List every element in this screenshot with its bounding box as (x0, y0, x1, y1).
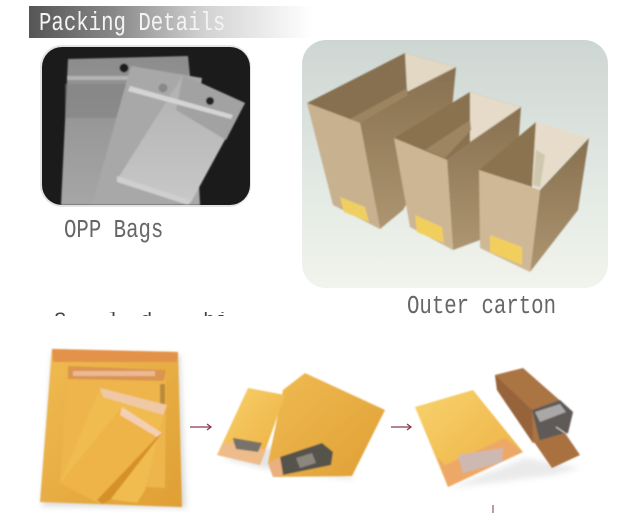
mailer: filled (415, 390, 523, 487)
caption: OPP Bags: OPP Bags (64, 216, 163, 246)
cut-off caption: i (216, 310, 228, 333)
cut-off caption: h (203, 310, 215, 333)
heading band: Packing Details (29, 6, 312, 39)
photo: stack of kraft bubble mailers (40, 349, 186, 508)
cut-off caption: l (107, 310, 119, 333)
heading band: Packing Details: Packing Details (39, 9, 225, 39)
cut-off caption: S (54, 310, 66, 333)
panel: OPP bags photo (40, 45, 251, 207)
photo: mailer and cardboard box (415, 368, 580, 488)
cut-off caption: d (140, 310, 152, 333)
mailer: larger with contents (268, 373, 385, 477)
mailer: smaller with contents (217, 388, 285, 465)
carton: small (479, 122, 589, 272)
panel: outer carton photo (302, 40, 608, 288)
arrow: step two (391, 424, 411, 430)
carton: medium (394, 92, 521, 250)
arrow: cut-off stub (492, 505, 494, 513)
photo: mailers with contents (217, 373, 385, 480)
carton: large (307, 53, 456, 229)
cardboard box (495, 368, 580, 468)
arrow: step one (190, 424, 211, 430)
caption: Outer carton: Outer carton (407, 292, 556, 322)
